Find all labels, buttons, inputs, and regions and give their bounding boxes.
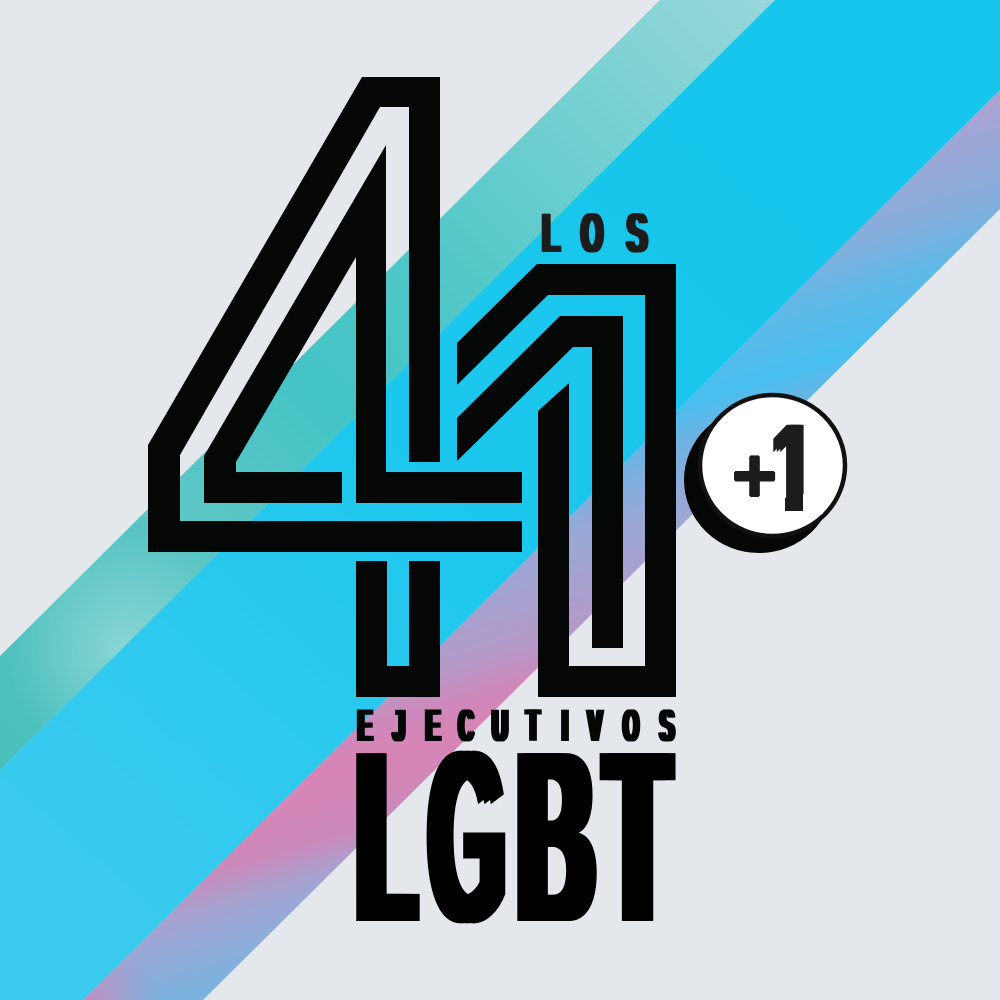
word EJECUTIVOS: E: [425, 700, 440, 751]
heading word LOS: S: [626, 201, 647, 264]
heading word LOS: [542, 201, 649, 264]
word LGBT: G: [429, 700, 505, 972]
heading word LOS: L: [542, 201, 560, 264]
word EJECUTIVOS: U: [492, 700, 508, 751]
word LGBT: [356, 700, 676, 972]
word EJECUTIVOS: S: [659, 700, 674, 751]
word EJECUTIVOS: [356, 700, 676, 751]
badge plus sign: +: [732, 431, 777, 519]
word EJECUTIVOS: T: [526, 700, 539, 751]
heading word LOS: O: [581, 201, 602, 264]
word LGBT: T: [606, 700, 668, 972]
word EJECUTIVOS: I: [562, 700, 568, 751]
numeral 4: outer stroke: [148, 77, 522, 552]
badge disc with offset shadow: [684, 392, 848, 553]
word EJECUTIVOS: J: [392, 700, 405, 751]
badge numeral one: 1: [771, 399, 815, 538]
word EJECUTIVOS: V: [588, 700, 602, 751]
numeral 4: lower stem: [356, 561, 440, 697]
numeral 1: outer stroke: [457, 264, 676, 697]
word LGBT: L: [359, 700, 414, 972]
word EJECUTIVOS: O: [623, 700, 639, 751]
word EJECUTIVOS: E: [358, 700, 372, 751]
badge +1: [684, 392, 848, 553]
numeral 1: inner stroke: [457, 316, 623, 648]
numeral 4: inner stroke: [204, 145, 522, 503]
word EJECUTIVOS: C: [459, 700, 473, 751]
word LGBT: B: [518, 700, 594, 972]
